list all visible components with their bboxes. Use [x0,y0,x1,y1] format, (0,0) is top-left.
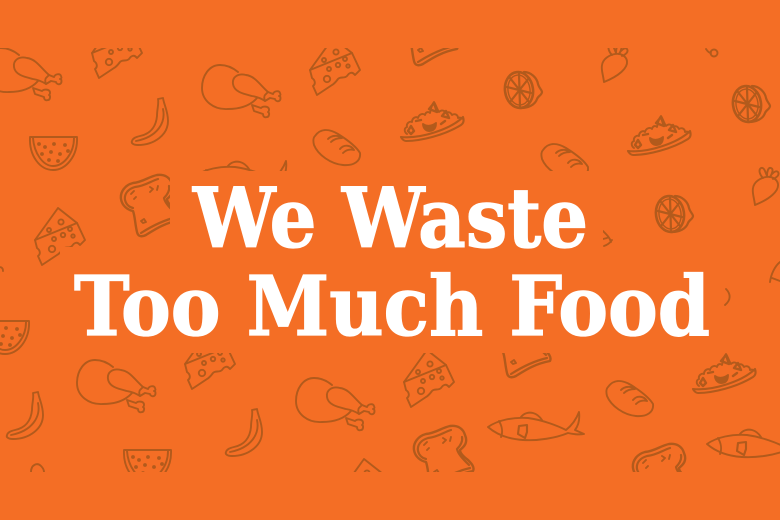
icon: toast lower centre [502,353,552,378]
icon: watermelon top [30,137,77,170]
title backdrop [60,171,725,353]
icon: toast bottom right [632,442,686,472]
icon: toast bottom centre [412,424,475,472]
icon: lemon top right [731,84,770,124]
icon: chicken lower left [77,360,156,412]
icon: fish lower right [707,429,780,457]
title [74,171,710,355]
icon: cheese left [35,208,85,265]
icon: toast top [410,48,458,66]
icon: bread right [540,143,589,171]
icon: lemon right [654,194,693,234]
icon: chicken top centre [202,65,280,117]
icon: toast left [120,174,170,238]
icon: salad top [401,102,464,141]
icon: fish lower [488,412,584,440]
icon: chicken top left [0,48,62,100]
icon: banana top [132,98,168,145]
icon: beet top [602,45,628,82]
icon: chicken lower centre [296,378,374,430]
title line 1: We Waste [192,171,588,267]
icon: cheese lower [184,353,236,390]
icon: watermelon left edge [0,321,29,354]
icon: salad right [628,116,691,155]
icon: beet right [753,168,779,205]
icon: bread lower right [606,381,653,416]
icon: cheese top left [91,48,143,79]
title line 2: Too Much Food [74,259,710,355]
icon: fragment beside title [725,289,730,305]
icon: salad lower right [693,354,756,393]
icon: banana lower left [7,392,43,439]
icon: cheese top centre [309,48,361,96]
icon: watermelon bottom [123,449,172,472]
icon: cheese bottom [354,458,382,472]
icon: bread top [313,130,360,165]
icon: fish top fragment [202,160,288,171]
icon: banana lower centre [226,409,262,456]
icon: cheese lower centre [404,350,454,407]
icon: lemon top [503,70,542,110]
